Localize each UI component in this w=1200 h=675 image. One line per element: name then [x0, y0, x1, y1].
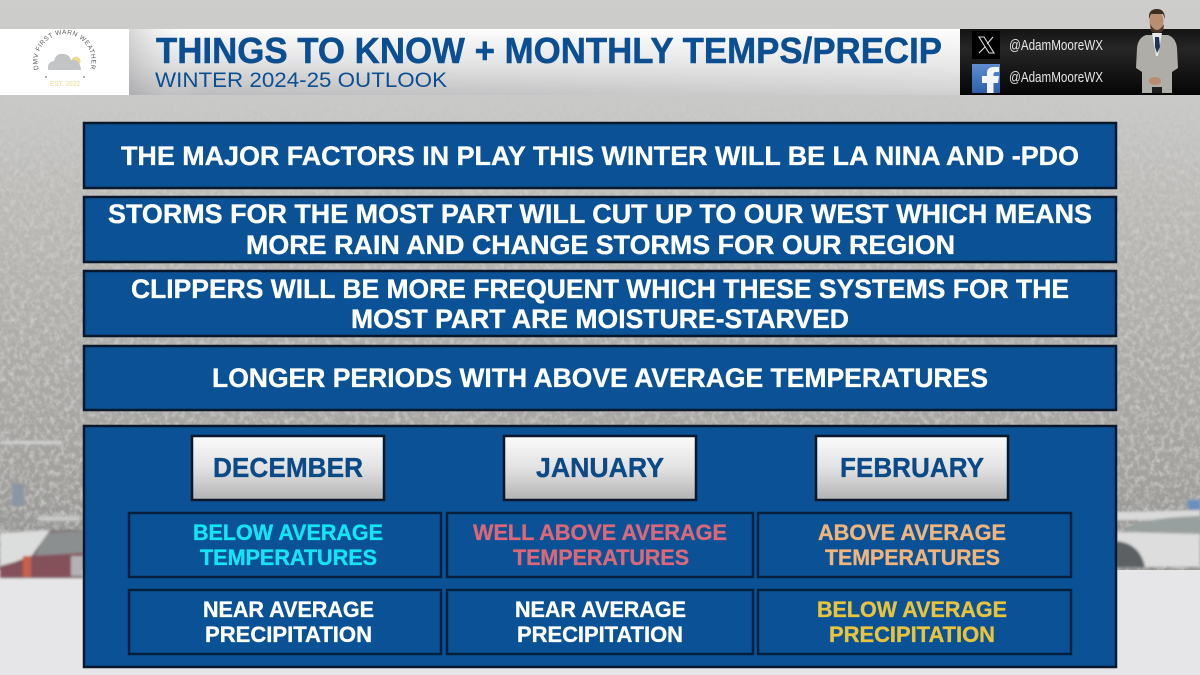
- panel: major factors: [84, 123, 1116, 188]
- month heading: January: [504, 436, 696, 500]
- Facebook handle: @AdamMooreWX: [1009, 70, 1103, 86]
- January temperature: TEMPERATURES: [513, 545, 689, 570]
- month heading: January: JANUARY: [536, 452, 664, 483]
- February precipitation: BELOW AVERAGE: [817, 597, 1007, 622]
- panel: monthly outlook: [84, 426, 1116, 667]
- month heading: February: FEBRUARY: [840, 452, 984, 483]
- car: right, white and snow covered: [1116, 500, 1200, 567]
- month heading: December: DECEMBER: [213, 452, 363, 483]
- December temperature: BELOW AVERAGE: [193, 520, 383, 545]
- car: left, red and snow covered: [0, 441, 83, 578]
- month heading: December: [192, 436, 384, 500]
- panel: clippers: CLIPPERS WILL BE MORE FREQUENT WHICH THESE SYSTEMS FOR THE: [131, 274, 1069, 304]
- December temperature: TEMPERATURES: [200, 545, 377, 570]
- header subtitle: WINTER 2024-25 OUTLOOK: [155, 69, 447, 92]
- logo ring text: DMV FIRST WARN WEATHER: [33, 30, 96, 70]
- panel: storm track: STORMS FOR THE MOST PART WILL CUT UP TO OUR WEST WHICH MEANS: [108, 199, 1092, 229]
- panel: clippers: [84, 271, 1116, 336]
- panel: major factors: THE MAJOR FACTORS IN PLAY THIS WINTER WILL BE LA NINA AND -PDO: [121, 141, 1079, 171]
- social panel: [960, 9, 1200, 95]
- icon: X logo: [972, 31, 1000, 59]
- header band: [129, 29, 960, 95]
- logo cloud: [48, 54, 81, 70]
- month heading: February: [816, 436, 1008, 500]
- logo established year: EST. 2022: [50, 81, 80, 88]
- icon: Facebook logo: [972, 64, 1000, 93]
- January precipitation: PRECIPITATION: [517, 622, 683, 647]
- December precipitation: [129, 590, 441, 654]
- February temperature: [758, 513, 1071, 577]
- February temperature: ABOVE AVERAGE: [818, 520, 1006, 545]
- February precipitation: PRECIPITATION: [829, 622, 995, 647]
- December temperature: [129, 513, 441, 577]
- logo sun: [72, 56, 80, 66]
- February temperature: TEMPERATURES: [825, 545, 1000, 570]
- January precipitation: NEAR AVERAGE: [515, 597, 686, 622]
- panel: above average periods: [84, 346, 1116, 410]
- panel: storm track: MORE RAIN AND CHANGE STORMS FOR OUR REGION: [246, 230, 955, 260]
- X handle: @AdamMooreWX: [1009, 38, 1103, 54]
- January temperature: WELL ABOVE AVERAGE: [473, 520, 727, 545]
- panel: storm track: [84, 197, 1116, 262]
- January temperature: [447, 513, 753, 577]
- December precipitation: PRECIPITATION: [205, 622, 372, 647]
- January precipitation: [447, 590, 753, 654]
- February precipitation: [758, 590, 1071, 654]
- panel: clippers: MOST PART ARE MOISTURE-STARVED: [351, 304, 849, 334]
- presenter figure: [1136, 9, 1178, 93]
- logo panel: DMV First Warn Weather: [0, 29, 129, 95]
- December precipitation: NEAR AVERAGE: [203, 597, 374, 622]
- header title: THINGS TO KNOW + MONTHLY TEMPS/PRECIP: [156, 30, 942, 71]
- panel: above average periods: LONGER PERIODS WITH ABOVE AVERAGE TEMPERATURES: [212, 363, 988, 393]
